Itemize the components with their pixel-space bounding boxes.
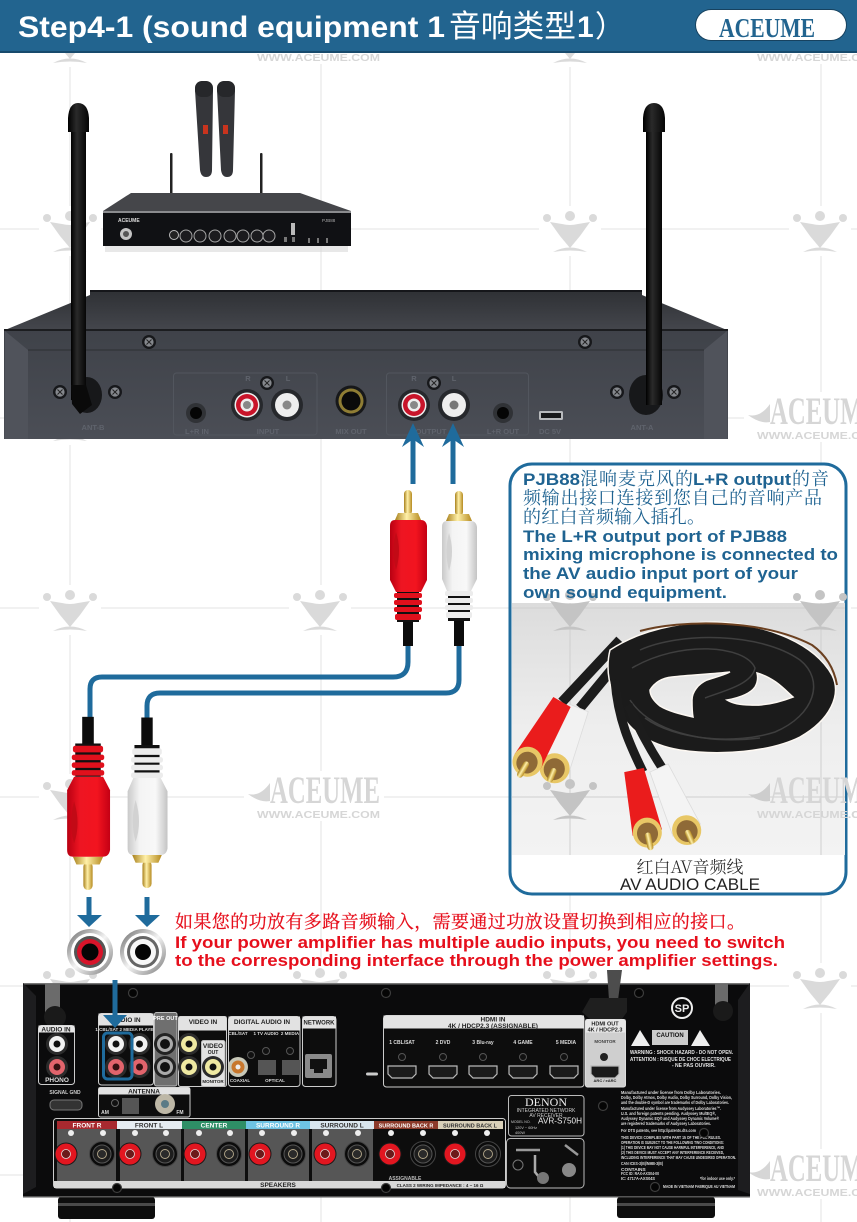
title: 1 <box>577 11 594 44</box>
title: Step4-1 (sound equipment 1 <box>18 11 445 44</box>
mixing microphone rear panel <box>4 290 728 439</box>
legal text: (2) THIS DEVICE MUST ACCEPT ANY INTERFERENCE RECEIVED, <box>621 1150 724 1156</box>
header bar <box>0 0 857 53</box>
HDMI in block: 5 MEDIA <box>556 1040 577 1046</box>
video out block: OUT <box>208 1050 218 1056</box>
input port group: INPUT <box>257 427 280 436</box>
legal text: Manufactured under license from Dolby Laboratories. <box>621 1090 721 1096</box>
digital audio block <box>228 1016 300 1086</box>
video out block: VIDEO <box>203 1043 223 1050</box>
pre out block: PRE OUT <box>153 1016 178 1022</box>
blue cables <box>90 645 459 718</box>
legal text: are registered trademarks of Audyssey Laboratories. <box>621 1121 711 1127</box>
antenna block: AM <box>101 1110 109 1116</box>
receiver feet <box>58 1197 715 1219</box>
legal text: CONTAINS <box>621 1167 646 1173</box>
DENON model plate: INTEGRATED NETWORK <box>517 1108 576 1114</box>
speaker terminals <box>54 1118 506 1192</box>
digital audio block: 1 TV AUDIO <box>253 1031 279 1036</box>
speaker channel headers: SURROUND R <box>256 1122 300 1130</box>
cable caption: AV AUDIO CABLE <box>620 875 760 894</box>
panel: cable callout <box>506 464 857 894</box>
callout text: mixing microphone is connected to <box>523 546 838 564</box>
audio in block <box>95 1014 157 1085</box>
antenna block <box>98 1088 190 1117</box>
DENON model plate: DENON <box>525 1095 567 1109</box>
legal text: Dolby, Dolby Atmos, Dolby Audio, Dolby Surround, Dolby Vision, <box>621 1095 733 1101</box>
legal text: Audyssey Dynamic EQ® and Audyssey Dynamic Volume® <box>621 1115 719 1122</box>
phono input: AUDIO IN <box>41 1026 71 1034</box>
DC 5V port: DC 5V <box>539 427 561 436</box>
logo pill <box>695 9 847 43</box>
right antenna <box>610 103 681 415</box>
antenna block: ANTENNA <box>128 1088 160 1096</box>
legal text: INCLUDING INTERFERENCE THAT MAY CAUSE UNDESIRED OPERATION. <box>621 1155 736 1161</box>
legal text: Manufactured under license from Audyssey Laboratories™. <box>621 1106 721 1112</box>
HDMI cable and output block: HDMI OUT <box>591 1022 619 1028</box>
DENON model plate: 400W <box>515 1131 525 1135</box>
mixing microphone rear panel: ANT-A <box>631 423 654 432</box>
HDMI cable and output block: MONITOR <box>594 1039 616 1044</box>
mixing microphone rear panel: ANT-B <box>82 423 105 432</box>
HDMI cable and output block: 4K / HDCP2.3 <box>588 1028 622 1034</box>
title <box>18 9 625 44</box>
legal text: and the double-D symbol are trademarks of Dolby Laboratories. <box>621 1100 729 1106</box>
highlight around input 1 <box>104 1033 132 1079</box>
callout text <box>523 469 838 602</box>
product photo: mixing receiver unit <box>103 153 351 252</box>
logo pill: ACEUME <box>719 13 815 43</box>
DENON model plate: AVR-S750H <box>538 1116 582 1126</box>
title: ） <box>595 11 625 44</box>
output port group: L <box>452 374 457 383</box>
product photo: mixing receiver unit: ACEUME <box>118 218 140 224</box>
video in block: VIDEO IN <box>189 1019 218 1026</box>
caution labels: CAUTION <box>656 1033 684 1039</box>
network block: NETWORK <box>304 1020 335 1026</box>
input port group: R <box>245 374 251 383</box>
HDMI in block: HDMI IN <box>481 1016 506 1024</box>
network block <box>302 1016 336 1086</box>
video out block: MONITOR <box>202 1079 224 1084</box>
digital audio block: 2 MEDIA <box>281 1031 300 1036</box>
audio in block: AUDIO IN <box>111 1017 141 1024</box>
DENON model plate: MODEL NO. <box>511 1120 531 1124</box>
red instruction text: 如果您的功放有多路音频输入，需要通过功放设置切换到相应的接口。 <box>175 912 745 932</box>
digital audio block: CBL/SAT <box>228 1031 248 1036</box>
DC 5V port <box>539 411 563 436</box>
digital audio block: COAXIAL <box>230 1078 250 1083</box>
HDMI in block: 1 CBL/SAT <box>389 1040 415 1046</box>
photo: AV audio cable <box>506 590 857 855</box>
AV receiver rear panel <box>23 970 750 1219</box>
HDMI cable and output block <box>582 970 627 1087</box>
legal text: *for indoor use only.* <box>700 1176 735 1182</box>
phono input <box>38 1026 74 1084</box>
HDMI in block: 4K / HDCP2.3 (ASSIGNABLE) <box>448 1023 538 1030</box>
mix out jack <box>335 386 367 436</box>
speaker channel headers: SURROUND L <box>320 1122 364 1130</box>
HDMI in block <box>384 1016 584 1087</box>
output port group: R <box>411 374 417 383</box>
audio in block: 1 CBL/SAT 2 MEDIA PLAYER <box>95 1027 157 1032</box>
HDMI in block: 4 GAME <box>513 1040 533 1046</box>
speaker channel headers <box>57 1121 503 1130</box>
DENON model plate: 120V ~ 60Hz <box>515 1126 537 1130</box>
lower red plug <box>67 717 110 890</box>
mix out jack: MIX OUT <box>335 427 367 436</box>
callout text: PJB88 <box>523 471 580 489</box>
legal text: THIS DEVICE COMPLIES WITH PART 15 OF THE FCC RULES. <box>621 1135 721 1141</box>
lower white plug <box>128 718 168 888</box>
legal text <box>621 1090 736 1190</box>
input port group <box>174 373 317 436</box>
left antenna <box>53 103 122 414</box>
photo plugs <box>506 694 706 853</box>
caution labels: ATTENTION : RISQUE DE CHOC ELECTRIQUE <box>630 1057 731 1063</box>
product photo: microphones <box>195 81 235 177</box>
product photo: mixing receiver unit: PJB88 <box>322 218 336 223</box>
input port group: L <box>286 374 291 383</box>
caution labels <box>630 1030 733 1069</box>
red instruction text <box>175 912 785 970</box>
red RCA socket <box>67 929 113 975</box>
signal ground <box>49 1090 82 1110</box>
digital audio block: OPTICAL <box>265 1078 285 1083</box>
callout text: 混响麦克风的 <box>580 469 693 489</box>
speaker terminals: ASSIGNABLE <box>389 1176 422 1182</box>
title: 音响类型 <box>449 9 576 44</box>
callout text: 的红白音频输入插孔。 <box>523 507 705 527</box>
speaker channel headers: SURROUND BACK L <box>443 1124 498 1130</box>
output port group: OUTPUT <box>416 427 447 436</box>
DENON model plate: AV RECEIVER <box>529 1113 563 1119</box>
video in block <box>178 1016 226 1086</box>
legal text: CAN ICES-3(B)/NMB-3(B) <box>621 1161 663 1167</box>
HDMI cable and output block: ARC / eARC <box>594 1078 617 1083</box>
arrow to input 1 <box>103 980 127 1028</box>
output port group <box>386 373 528 436</box>
legal text: (1) THIS DEVICE MAY NOT CAUSE HARMFUL INTERFERENCE, AND <box>621 1145 724 1151</box>
callout text: 频输出接口连接到您自己的音响产品 <box>523 488 822 508</box>
output port group: L+R OUT <box>487 427 520 436</box>
wiring diagram plate <box>506 1138 584 1188</box>
input port group: L+R IN <box>185 427 209 436</box>
speaker channel headers: SURROUND BACK R <box>379 1124 433 1130</box>
CSA mark: SP <box>675 1003 689 1015</box>
cable caption: 红白AV音频线 <box>636 853 744 878</box>
speaker terminals: SPEAKERS <box>260 1182 297 1189</box>
callout text: 的音 <box>792 469 829 489</box>
speaker terminals: CLASS 2 WIRING IMPEDANCE : 4 ~ 16 Ω <box>397 1183 484 1188</box>
legal text: OPERATION IS SUBJECT TO THE FOLLOWING TWO CONDITIONS: <box>621 1140 724 1146</box>
antenna stubs <box>44 984 733 1028</box>
callout text: the AV audio input port of your <box>523 565 799 583</box>
HDMI in block: 3 Blu-ray <box>472 1040 494 1046</box>
red instruction text: If your power amplifier has multiple audio inputs, you need to switch <box>175 933 785 952</box>
cable coil <box>562 622 837 772</box>
signal ground: SIGNAL GND <box>49 1090 81 1096</box>
digital audio block: DIGITAL AUDIO IN <box>234 1019 290 1026</box>
speaker channel headers: CENTER <box>201 1122 228 1130</box>
video out block <box>202 1040 225 1086</box>
legal text: U.S. and foreign patents pending. Audyssey MultEQ®, <box>621 1110 717 1117</box>
pre out block <box>153 1012 178 1086</box>
arrows down to sockets <box>77 897 160 927</box>
red instruction text: to the corresponding interface through the power amplifier settings. <box>175 951 778 970</box>
callout text: own sound equipment. <box>523 584 727 602</box>
caution labels: - NE PAS OUVRIR. <box>672 1063 716 1069</box>
upper red plug <box>390 490 427 646</box>
cable caption <box>620 853 760 894</box>
caution labels: WARNING : SHOCK HAZARD - DO NOT OPEN. <box>630 1050 733 1056</box>
upper white plug <box>442 491 477 646</box>
speaker channel headers: FRONT L <box>135 1122 163 1130</box>
HDMI in block: 2 DVD <box>436 1040 451 1046</box>
phono input: PHONO <box>45 1077 69 1084</box>
CSA mark <box>672 998 692 1018</box>
legal text: IC: 4717A-AXS04S <box>621 1176 656 1182</box>
callout text: The L+R output port of PJB88 <box>523 528 787 546</box>
legal text: For DTS patents, see http://patents.dts.com <box>621 1128 696 1134</box>
legal text: MADE IN VIETNAM FABRIQUE AU VIETNAM <box>663 1184 735 1190</box>
legal text: FCC ID: RAX-AXS04-00 <box>621 1171 659 1177</box>
speaker channel headers: FRONT R <box>73 1122 102 1130</box>
arrows up to output <box>402 423 464 484</box>
callout text: L+R output <box>693 471 792 489</box>
DENON model plate <box>508 1095 584 1136</box>
white RCA socket <box>120 929 166 975</box>
antenna block: FM <box>176 1110 184 1116</box>
